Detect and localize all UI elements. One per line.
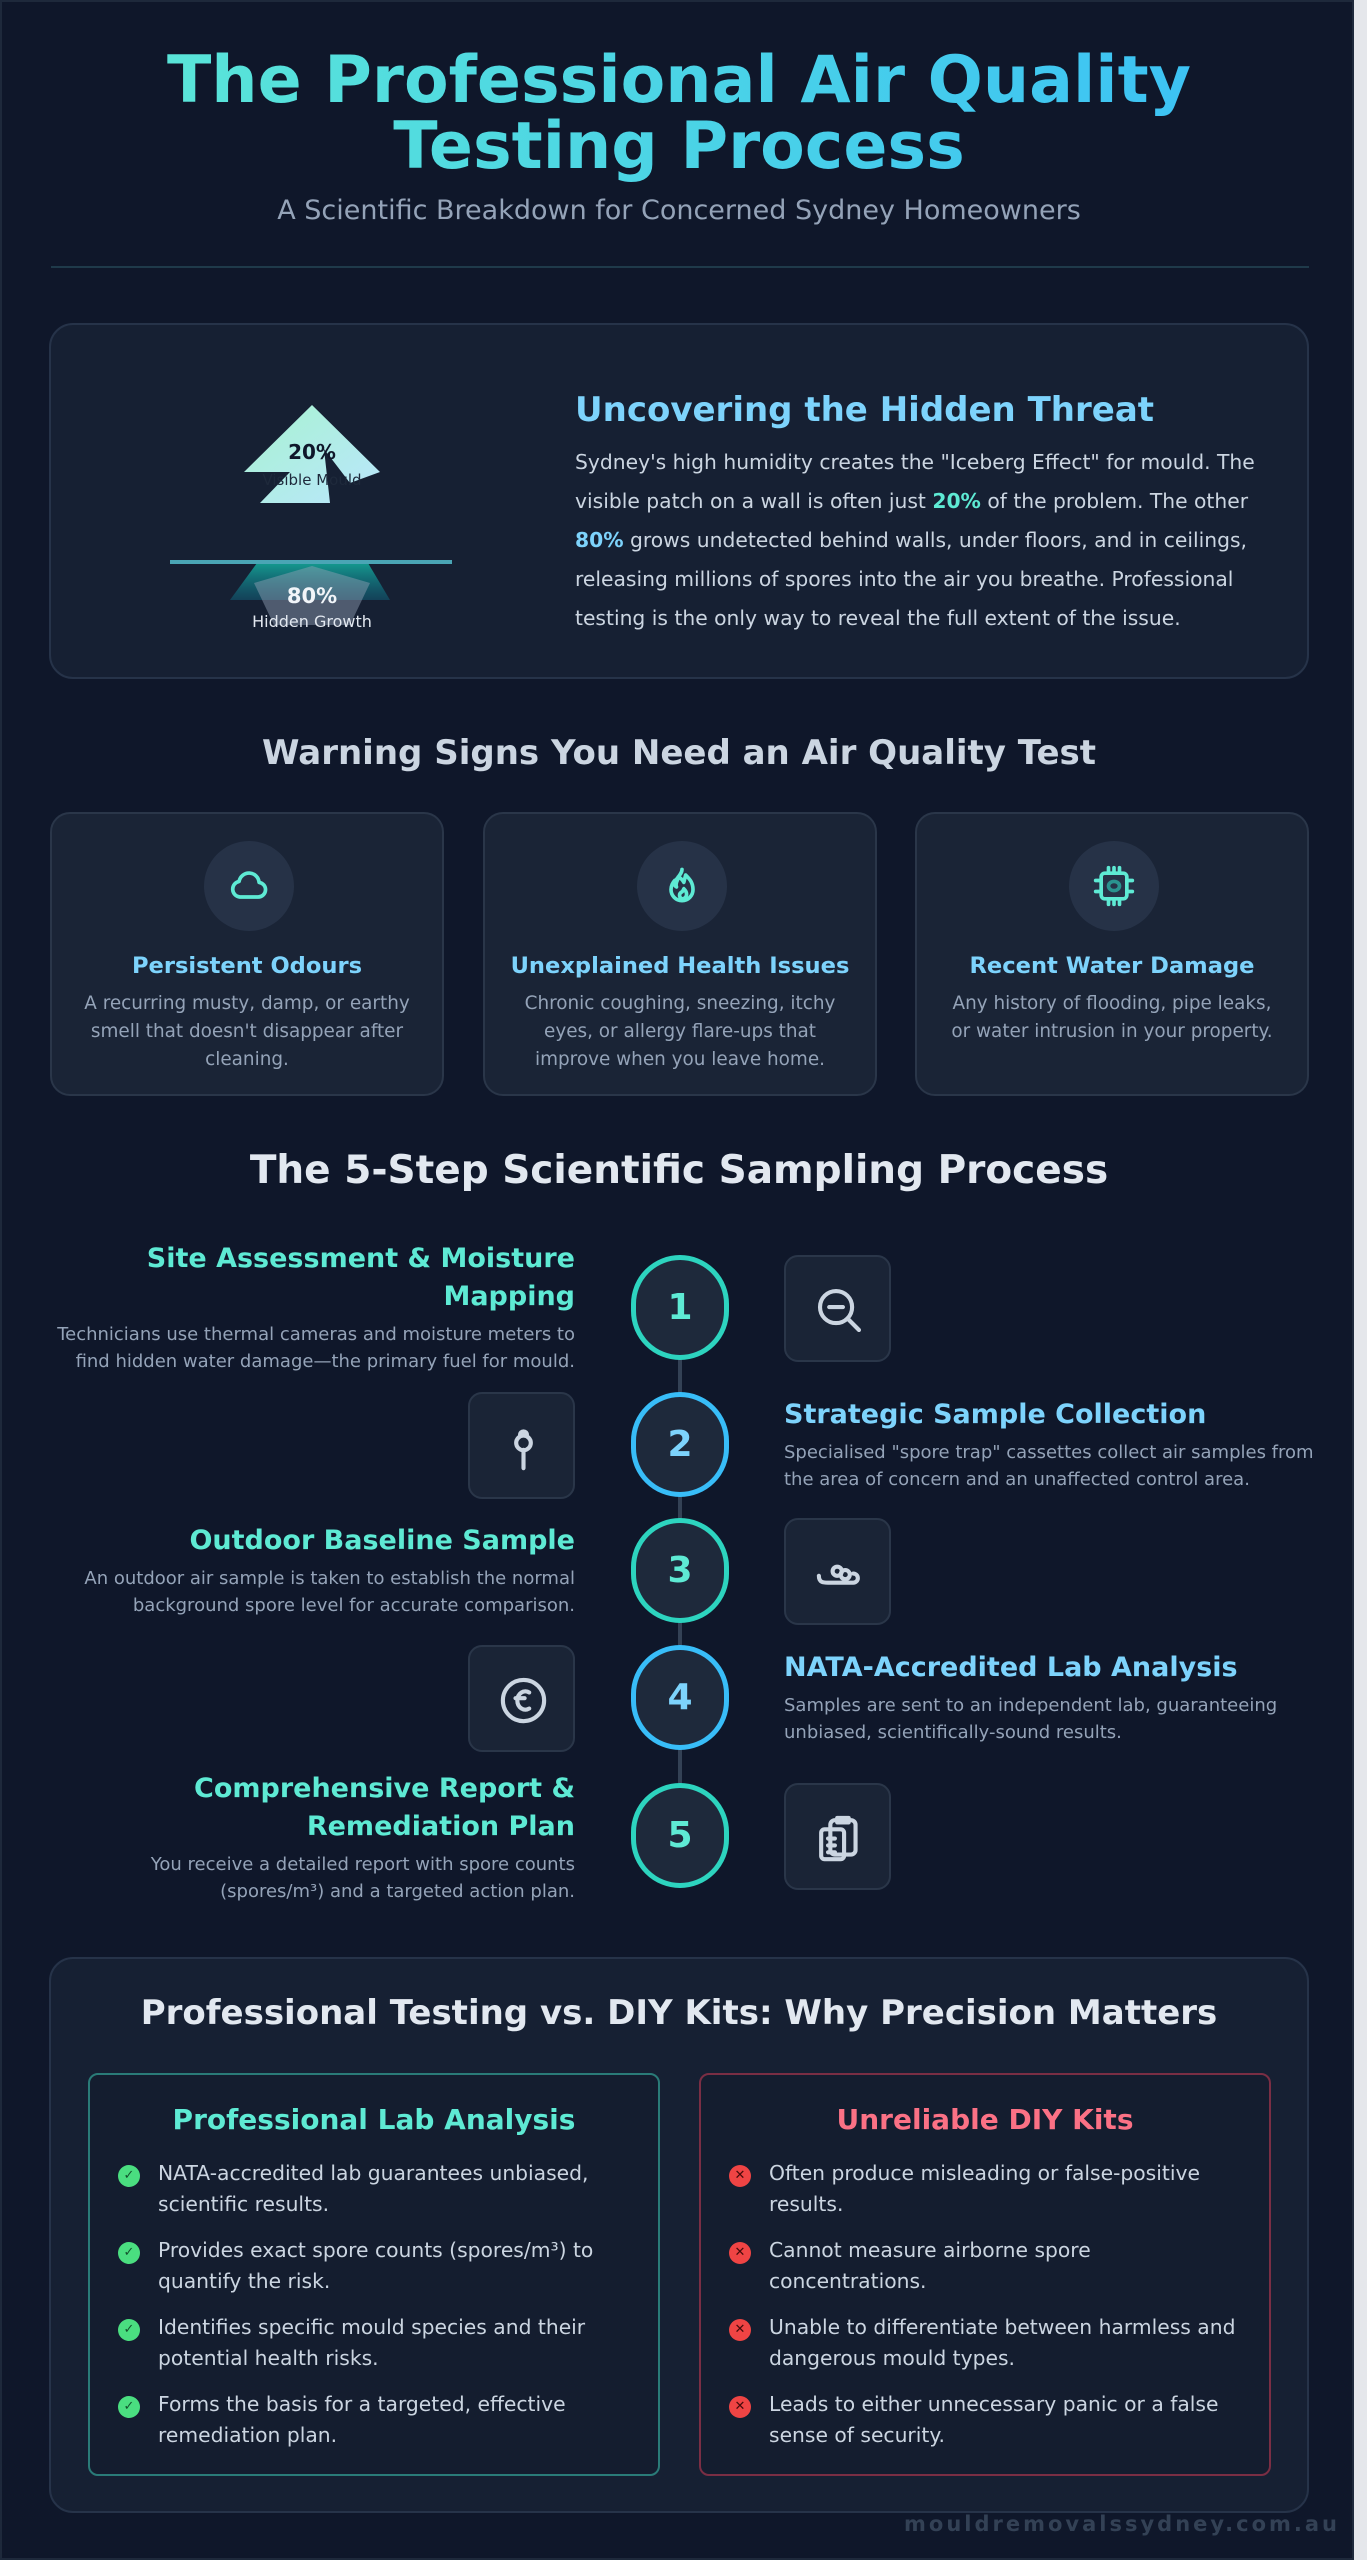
panel: hidden threat <box>49 323 1309 679</box>
box: professional: ✓ <box>124 2245 134 2260</box>
card: odours: A recurring musty, damp, or earthy smell that doesn't disappear after cleaning. <box>84 993 410 1070</box>
box: professional <box>88 2073 660 2476</box>
step 4: NATA-Accredited Lab Analysis <box>784 1652 1238 1683</box>
step 4: 4 <box>667 1677 693 1718</box>
heading: Professional Testing vs. DIY Kits: Why Precision Matters <box>141 1993 1217 2033</box>
icon: search <box>784 1255 891 1362</box>
card: health <box>483 812 877 1096</box>
box: diy: ✕ <box>735 2168 745 2183</box>
box: professional: Forms the basis for a targeted, effective remediation plan. <box>158 2392 566 2447</box>
box: professional: ✓ <box>124 2322 134 2337</box>
footer: mouldremovalssydney.com.au <box>904 2512 1340 2536</box>
heading: warning signs: Warning Signs You Need an Air Quality Test <box>262 733 1096 773</box>
step 4: Samples are sent to an independent lab, guaranteeing unbiased, scientifically-sound results. <box>784 1695 1277 1743</box>
title: Testing Process <box>393 109 965 184</box>
box: professional: ✓ <box>124 2399 134 2414</box>
paragraph: Sydney's high humidity creates the "Iceberg Effect" for mould. The visible patch on a wall is often just 20% of the problem. The other 80% grows undetected behind walls, under floors, and in ceilings, releasing millions of spores into the air you breathe. Professional testing is the only way to reveal the full extent of the issue. <box>575 450 1255 630</box>
subtitle: A Scientific Breakdown for Concerned Sydney Homeowners <box>277 195 1081 226</box>
step 2: 2 <box>667 1424 693 1465</box>
step 5 <box>150 1773 891 1902</box>
icon: euro <box>468 1645 575 1752</box>
icon: flame <box>637 841 727 931</box>
step 5: (spores/m³) and a targeted action plan. <box>220 1881 575 1902</box>
icon: sampler <box>468 1392 575 1499</box>
step 1 <box>57 1243 891 1372</box>
iceberg graphic <box>170 405 452 631</box>
icon: clipboard <box>784 1783 891 1890</box>
box: diy: Cannot measure airborne spore concentrations. <box>769 2238 1091 2293</box>
card: odours: Persistent Odours <box>132 953 362 979</box>
box: diy: Leads to either unnecessary panic or a false sense of security. <box>769 2392 1218 2447</box>
step 5: 5 <box>667 1815 693 1856</box>
step 2: Strategic Sample Collection <box>784 1399 1206 1430</box>
icon: cloud <box>204 841 294 931</box>
card: health: Chronic coughing, sneezing, itchy eyes, or allergy flare-ups that improve when you leave home. <box>525 993 835 1070</box>
step 1: 1 <box>667 1287 693 1328</box>
step 1: Technicians use thermal cameras and moisture meters to find hidden water damage—the primary fuel for mould. <box>57 1324 575 1372</box>
title <box>2 48 1356 190</box>
box: professional: NATA-accredited lab guarantees unbiased, scientific results. <box>158 2161 588 2216</box>
step 1: Site Assessment & Moisture Mapping <box>147 1243 575 1312</box>
iceberg graphic: Hidden Growth <box>252 612 372 631</box>
step 3: Outdoor Baseline Sample <box>189 1525 575 1556</box>
step 2: Specialised "spore trap" cassettes collect air samples from the area of concern and an unaffected control area. <box>784 1442 1314 1490</box>
box: diy: Unreliable DIY Kits <box>837 2103 1133 2136</box>
card: water damage <box>915 812 1309 1096</box>
step 2 <box>468 1392 1314 1499</box>
box: professional: ✓ <box>124 2168 134 2183</box>
step 3 <box>84 1518 891 1625</box>
box: professional: Professional Lab Analysis <box>173 2103 575 2136</box>
step 5: Comprehensive Report & Remediation Plan <box>194 1773 575 1842</box>
panel: comparison <box>49 1957 1309 2513</box>
title: The Professional Air Quality <box>167 43 1191 118</box>
box: diy: Often produce misleading or false-positive results. <box>769 2161 1200 2216</box>
icon: chip <box>1069 841 1159 931</box>
icon: wind <box>784 1518 891 1625</box>
step 5: You receive a detailed report with spore counts <box>151 1854 575 1875</box>
heading: Uncovering the Hidden Threat <box>575 390 1154 430</box>
card: health: Unexplained Health Issues <box>511 953 849 979</box>
step 3: 3 <box>667 1550 693 1591</box>
timeline line <box>678 1302 682 1842</box>
iceberg graphic: 80% <box>287 584 337 608</box>
card: water damage: Recent Water Damage <box>970 953 1254 979</box>
heading: 5-step process: The 5-Step Scientific Sampling Process <box>250 1148 1108 1193</box>
box: professional: Provides exact spore counts (spores/m³) to quantify the risk. <box>158 2238 593 2293</box>
step 4 <box>468 1645 1277 1752</box>
iceberg graphic: 20% <box>288 440 336 464</box>
iceberg graphic: Visible Mould <box>262 471 362 489</box>
box: diy: ✕ <box>735 2399 745 2414</box>
box: professional: Identifies specific mould species and their potential health risks. <box>158 2315 585 2370</box>
card: water damage: Any history of flooding, pipe leaks, or water intrusion in your property. <box>951 993 1273 1042</box>
step 3: An outdoor air sample is taken to establish the normal background spore level for accurate comparison. <box>84 1568 575 1616</box>
box: diy: ✕ <box>735 2245 745 2260</box>
box: diy: Unable to differentiate between harmless and dangerous mould types. <box>769 2315 1235 2370</box>
card: odours <box>50 812 444 1096</box>
box: diy <box>699 2073 1271 2476</box>
box: diy: ✕ <box>735 2322 745 2337</box>
